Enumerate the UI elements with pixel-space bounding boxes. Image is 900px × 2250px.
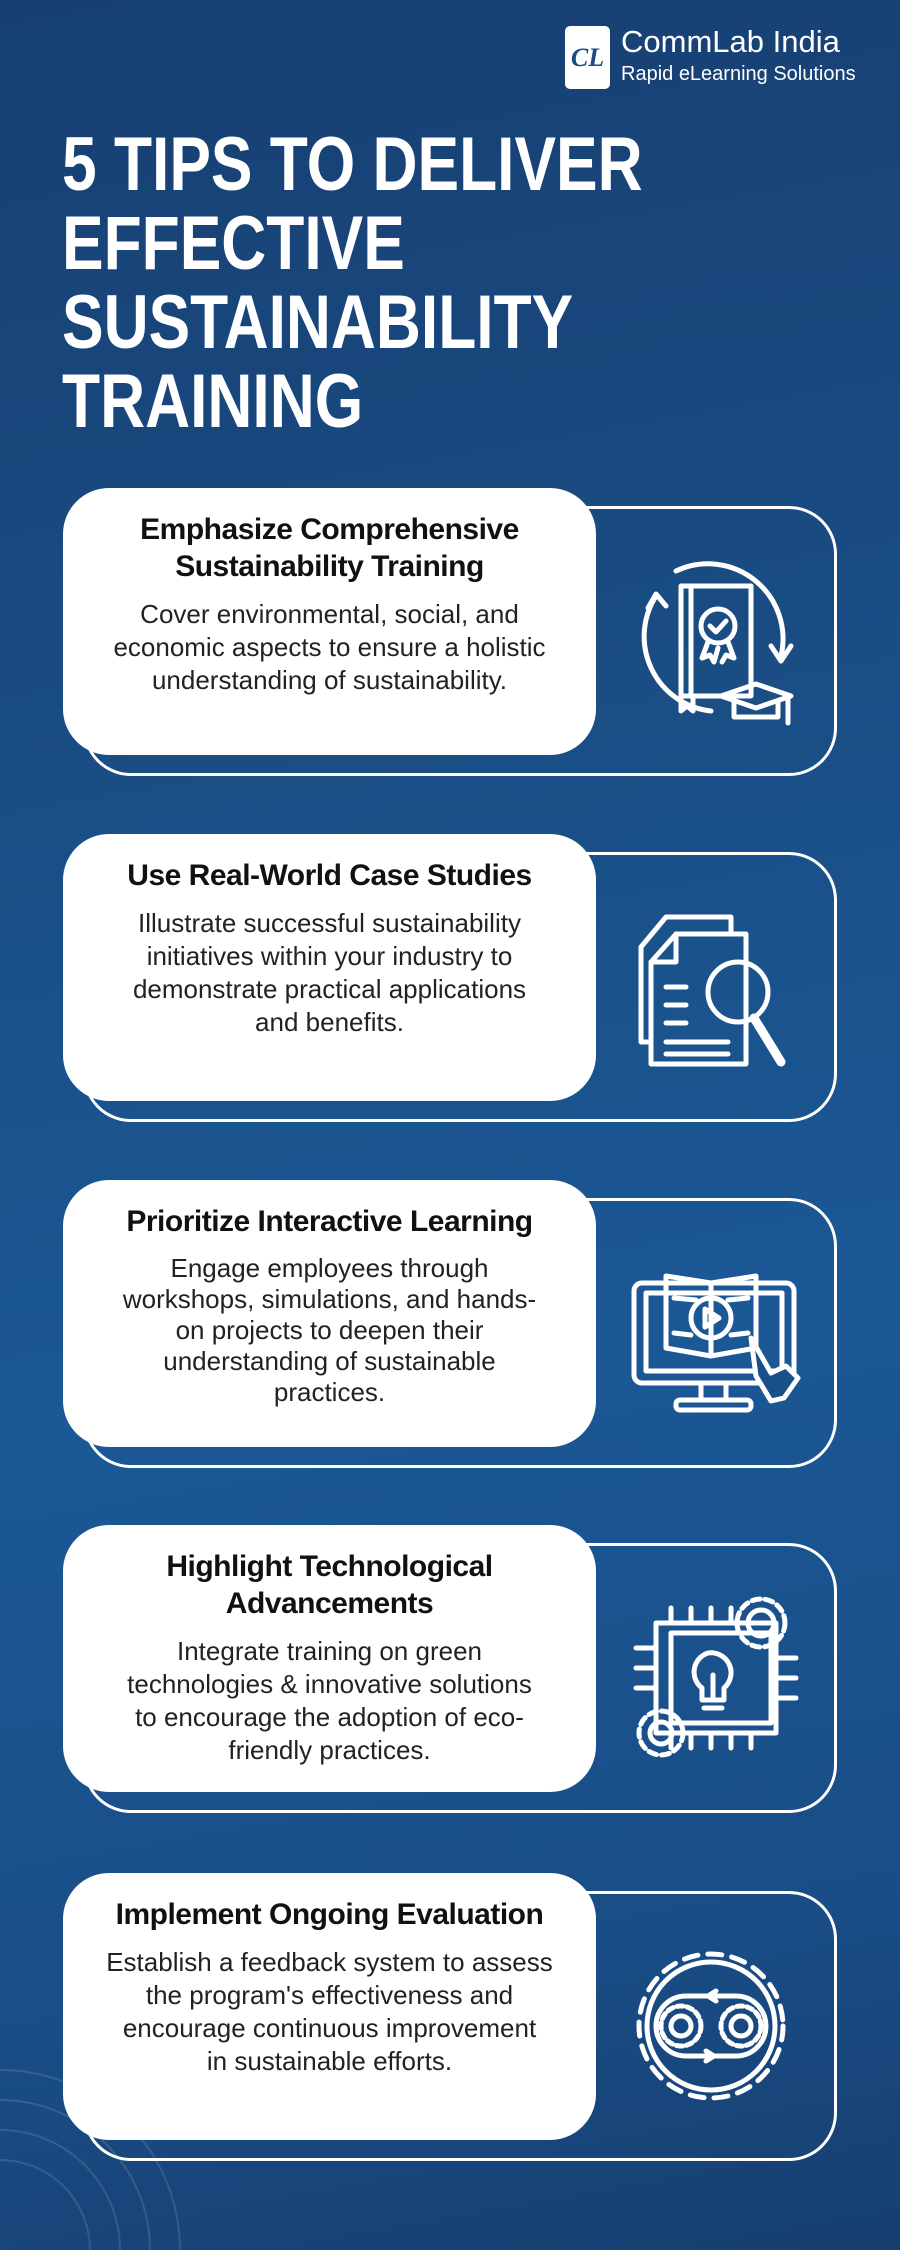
title: 5 TIPS TO DELIVER bbox=[62, 122, 643, 207]
text block: tip 1: Sustainability Training bbox=[175, 550, 484, 583]
icon: chip with bulb and gears bbox=[634, 1596, 798, 1758]
title: TRAINING bbox=[62, 359, 363, 444]
text block: tip 1: understanding of sustainability. bbox=[152, 665, 507, 695]
text block: tip 2: initiatives within your industry to bbox=[147, 941, 512, 971]
text block: tip 5: Implement Ongoing Evaluation bbox=[116, 1898, 543, 1931]
text block: tip 5: Establish a feedback system to assess bbox=[106, 1947, 553, 1977]
text block: tip 3: Engage employees through bbox=[170, 1253, 488, 1283]
text block: tip 3: understanding of sustainable bbox=[163, 1346, 496, 1376]
decorative arcs bottom-left bbox=[0, 2069, 181, 2250]
text block: tip 4: technologies & innovative solutions bbox=[127, 1669, 532, 1699]
text block: tip 1: Cover environmental, social, and bbox=[140, 599, 519, 629]
text block: tip 4: Integrate training on green bbox=[177, 1636, 482, 1666]
panel: tip 4 bbox=[63, 1525, 837, 1813]
text block: tip 4: friendly practices. bbox=[228, 1735, 431, 1765]
text block: tip 1: economic aspects to ensure a holistic bbox=[113, 632, 546, 662]
icon: gear with cycle bbox=[636, 1952, 786, 2100]
logo: Rapid eLearning Solutions bbox=[621, 63, 856, 85]
logo: CommLab India bbox=[621, 24, 840, 59]
text block: tip 4: Highlight Technological bbox=[166, 1550, 493, 1583]
text block: tip 3: on projects to deepen their bbox=[176, 1315, 483, 1345]
text block: tip 2: demonstrate practical applications bbox=[133, 974, 526, 1004]
title: EFFECTIVE bbox=[62, 201, 405, 286]
text block: tip 1: Emphasize Comprehensive bbox=[140, 513, 519, 546]
text block: tip 2: Illustrate successful sustainability bbox=[138, 908, 521, 938]
panel: tip 1 bbox=[63, 488, 837, 776]
text block: tip 2: Use Real-World Case Studies bbox=[127, 859, 532, 892]
text block: tip 3 bbox=[63, 1180, 596, 1447]
text block: tip 5 bbox=[63, 1873, 596, 2140]
text block: tip 5: in sustainable efforts. bbox=[207, 2046, 452, 2076]
icon: documents with magnifier bbox=[638, 914, 786, 1066]
text block: tip 4: to encourage the adoption of eco- bbox=[135, 1702, 524, 1732]
text block: tip 4 bbox=[63, 1525, 596, 1792]
panel: tip 5 bbox=[63, 1873, 837, 2161]
icon: certificate book with graduation cap bbox=[642, 561, 794, 726]
icon: monitor with e-book and pointer bbox=[632, 1274, 801, 1412]
text block: tip 1 bbox=[63, 488, 596, 755]
text block: tip 5: encourage continuous improvement bbox=[123, 2013, 536, 2043]
logo: CL bbox=[571, 43, 604, 72]
text block: tip 4: Advancements bbox=[226, 1587, 433, 1620]
text block: tip 2 bbox=[63, 834, 596, 1101]
text block: tip 2: and benefits. bbox=[255, 1007, 404, 1037]
text block: tip 3: Prioritize Interactive Learning bbox=[126, 1205, 533, 1238]
title bbox=[62, 122, 643, 444]
logo bbox=[565, 24, 856, 89]
panel: tip 3 bbox=[63, 1180, 837, 1468]
text block: tip 3: practices. bbox=[274, 1377, 385, 1407]
panel: tip 2 bbox=[63, 834, 837, 1122]
text block: tip 3: workshops, simulations, and hands- bbox=[123, 1284, 536, 1314]
text block: tip 5: the program's effectiveness and bbox=[146, 1980, 513, 2010]
title: SUSTAINABILITY bbox=[62, 280, 573, 365]
